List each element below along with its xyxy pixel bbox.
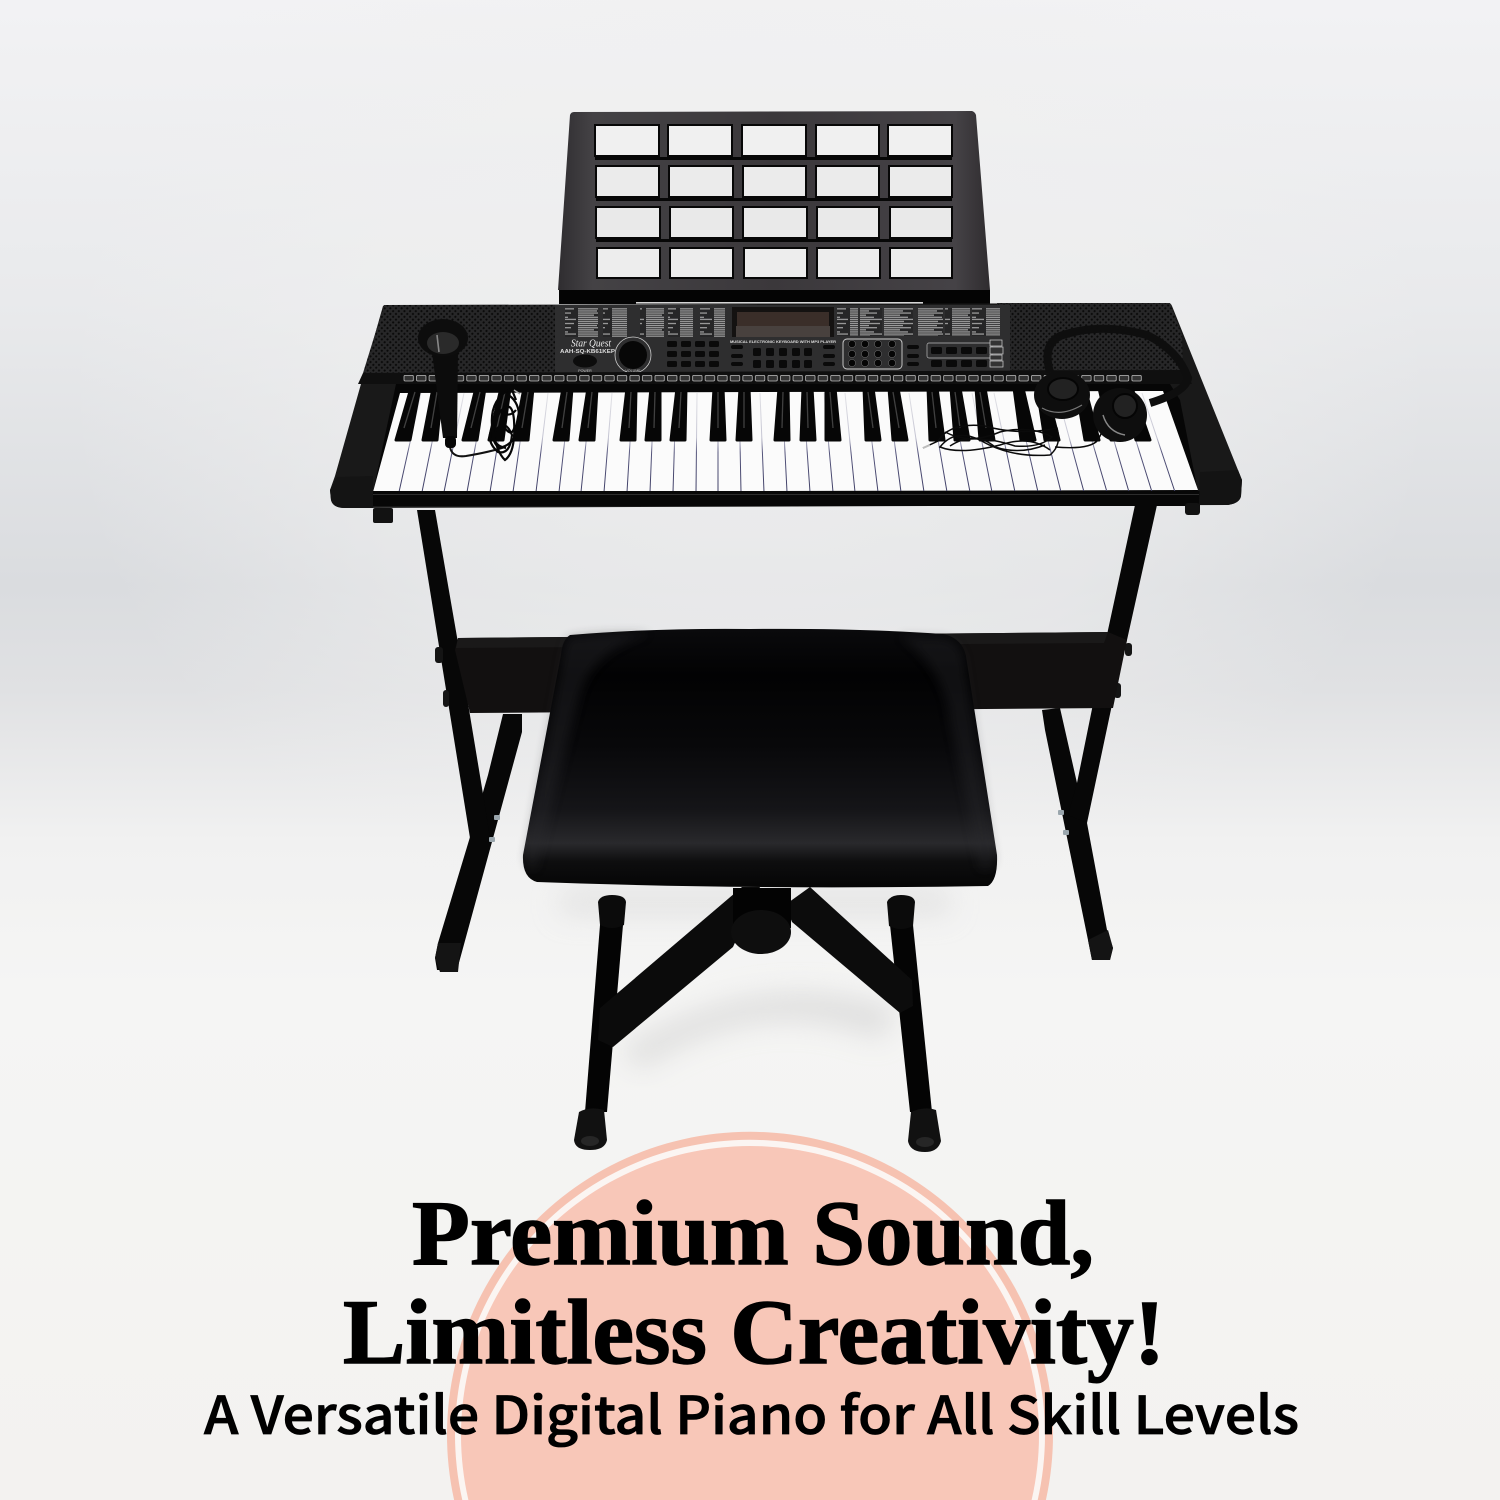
stand grid row 3 [596,207,952,238]
right ear cup [1093,388,1147,442]
keyboard body [330,303,1242,508]
select and learn buttons [731,345,919,366]
centre column [731,888,791,954]
headline line 1: Premium Sound, [412,1182,1094,1284]
key well [373,384,1198,492]
light ledge edge under music stand [636,302,923,304]
right adjustment knobs [1114,643,1132,698]
power button: POWER [578,369,592,373]
headband [1048,329,1188,403]
black keys [396,388,1150,440]
floor shadows [560,890,950,1070]
left arm [598,887,760,1047]
left top cap [598,895,626,928]
music stand [558,111,990,304]
left foot cap [435,943,461,972]
right top cap [887,895,915,929]
stand ledge [559,290,990,304]
MP3 controls [927,343,992,367]
keyboard stand: cross bar [455,632,1127,713]
decorative pink circle [447,1132,1053,1500]
right foot cap [1088,930,1113,960]
mic head [418,319,468,357]
control panel [555,305,1010,374]
stand grid row 1 [595,125,952,156]
function buttons [667,341,719,367]
keyboard stand: left leg [417,510,522,972]
right bolts [1058,810,1069,835]
stool seat [523,629,997,887]
volume knob: VOLUME [625,369,641,373]
white keys [373,391,1198,492]
keyboard stand: right leg [1042,505,1157,960]
microphone [418,319,505,456]
stand frame [558,111,990,290]
left tube [585,925,623,1112]
headline [343,1182,1165,1383]
mounting clips [373,503,1200,523]
stand grid row 4 [597,248,952,278]
stand grid row 2 [596,166,952,197]
left bolts [489,815,500,842]
left end cap [330,476,373,508]
right upright [1068,505,1157,823]
left voice list [565,308,725,337]
left foot bar [435,714,522,970]
subtitle: A Versatile Digital Piano for All Skill Levels [204,1374,1299,1449]
left upright [417,510,490,838]
front rail [372,491,1200,506]
right tube [890,925,932,1112]
headphone cable [923,418,1104,455]
left speaker grille [363,305,560,373]
key function label strip [358,370,1192,384]
stool legs and base [574,887,941,1152]
mic handle [432,352,458,438]
right foot [908,1108,941,1152]
right end cap [1199,470,1242,505]
right rhythm list [837,308,1000,336]
volume knob [615,337,651,373]
display screen [732,307,834,337]
panel title: MUSICAL ELECTRONIC KEYBOARD WITH MP3 PLAYER [730,339,836,344]
left adjustment knobs [435,647,449,707]
stand bar shadows [595,157,952,242]
keyboard [330,302,1242,523]
coiled cable [490,389,520,460]
model number: AAH-SQ-KB61KEP [560,349,615,355]
right speaker grille [997,303,1183,370]
left foot [574,1108,607,1150]
sound setting buttons [753,348,812,368]
mic cable [450,447,505,456]
number pad [843,339,902,369]
connector icons [990,340,1003,367]
left ear cup [1034,371,1090,419]
right foot bar [1042,708,1113,960]
right arm [785,887,913,1013]
headline line 2: Limitless Creativity! [343,1281,1165,1383]
headphones [1034,329,1188,442]
power button [573,354,597,373]
brand logo: Star Quest [571,338,611,350]
black key gloss [404,392,986,428]
